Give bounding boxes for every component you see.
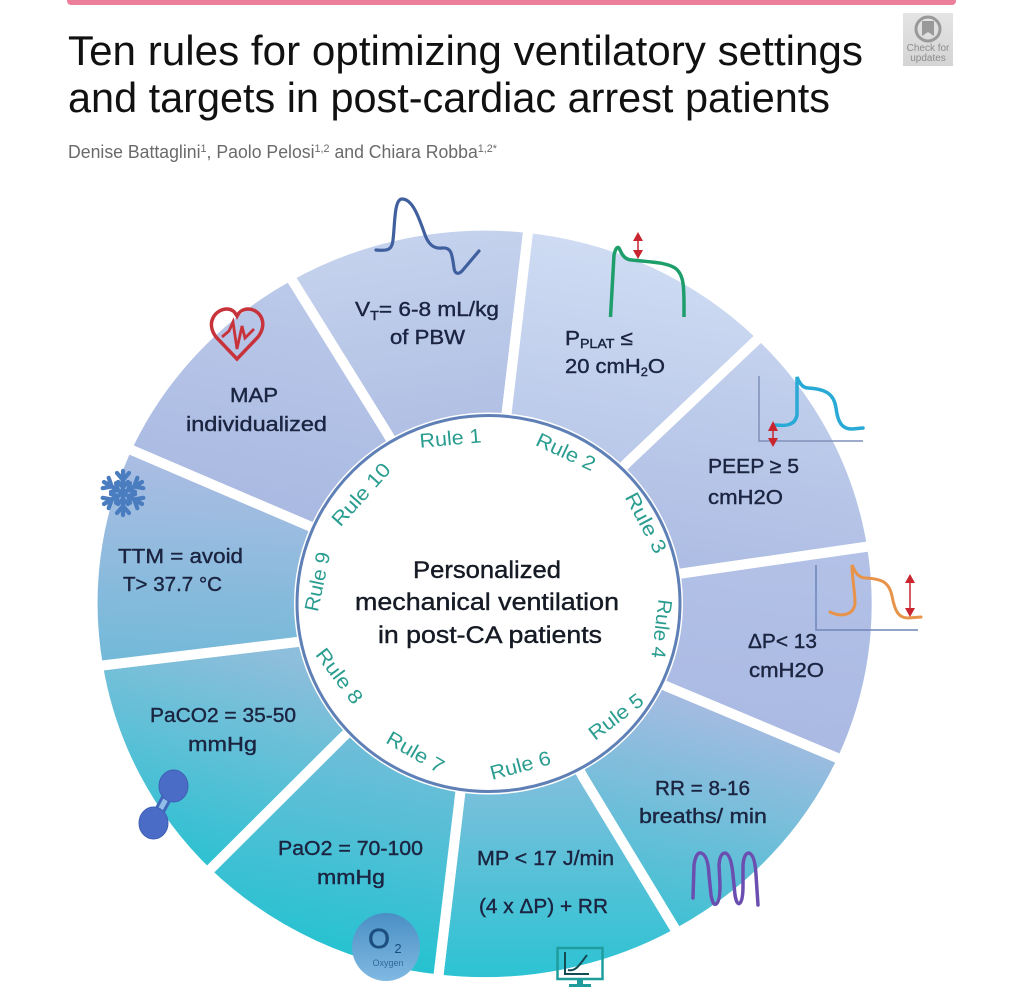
rule 8 text (150, 704, 296, 756)
rule 6 text (477, 847, 614, 918)
rule 4 text: cmH2O (749, 659, 824, 682)
check for updates badge: Check for (907, 43, 950, 54)
rule 2 text (565, 327, 665, 379)
rule labels: Rule 6 (488, 748, 553, 785)
icon: molecule (139, 770, 188, 839)
rule 5 text: breaths/ min (639, 805, 767, 828)
rule 4 text (748, 630, 824, 682)
rule 1 text: T (370, 308, 379, 323)
rule 5 text (639, 777, 767, 828)
panel: rule 2 (488, 228, 761, 603)
rule 2 text: 2 (641, 365, 648, 379)
centre circle (294, 412, 683, 794)
rule 7 text: PaO2 = 70-100 (278, 837, 423, 860)
rule labels: Rule 3 (620, 489, 671, 557)
panel: rule 7 (207, 603, 488, 981)
rule labels (301, 425, 675, 785)
centre text (355, 557, 619, 649)
centre text: mechanical ventilation (355, 589, 619, 616)
rule 9 text: TTM = avoid (118, 545, 243, 568)
centre text: Personalized (413, 557, 561, 584)
rule 8 text: mmHg (188, 733, 257, 756)
panel: rule 5 (488, 603, 842, 933)
rule 3 text: PEEP ≥ 5 (708, 455, 799, 478)
rule 6 text: MP < 17 J/min (477, 847, 614, 870)
rule labels: Rule 9 (301, 550, 335, 613)
title: and targets in post-cardiac arrest patients (68, 74, 830, 121)
panel: rule 6 (438, 603, 678, 987)
icon: oxygen badge: Oxygen (372, 958, 404, 968)
rule labels: Rule 4 (646, 598, 675, 659)
rule 1 text: of PBW (390, 326, 466, 349)
rule 2 text: 20 cmH (565, 355, 636, 378)
panel: rule 9 (93, 448, 488, 666)
rule 2 text: ≤ (614, 327, 633, 350)
rule 8 text: PaCO2 = 35-50 (150, 704, 296, 727)
rule 2 text: PLAT (580, 336, 615, 351)
icon: oxygen badge: 2 (394, 941, 402, 956)
rule 3 text: cmH2O (708, 486, 783, 509)
icon: tidal volume wave (376, 199, 479, 273)
authors: Denise Battaglini (68, 142, 203, 162)
rule labels: Rule 10 (328, 459, 395, 531)
rule labels: Rule 2 (532, 429, 599, 476)
rule 10 text (186, 384, 327, 436)
icon: PEEP curve (759, 376, 863, 447)
wheel of ten rules (93, 199, 921, 987)
rule 6 text: (4 x ΔP) + RR (479, 895, 608, 918)
title: Ten rules for optimizing ventilatory settings (68, 27, 863, 74)
panel: rule 1 (290, 199, 528, 603)
authors: 1,2* (478, 143, 498, 155)
panel: rule 8 (98, 603, 488, 872)
rule labels: Rule 5 (585, 689, 648, 745)
rule 1 text: = 6-8 mL/kg (379, 298, 499, 321)
authors: 1,2 (315, 143, 330, 155)
icon: snowflake (101, 471, 145, 515)
panel: rule 3 (488, 336, 872, 603)
pink top bar (67, 0, 956, 5)
rule 2 text: O (648, 355, 665, 378)
check for updates badge (903, 13, 953, 66)
title (68, 27, 863, 121)
authors: , Paolo Pelosi (207, 142, 315, 162)
check for updates badge: updates (910, 53, 946, 64)
icon: respiratory rate wave (693, 853, 758, 905)
rule labels: Rule 8 (311, 644, 367, 709)
rule 5 text: RR = 8-16 (655, 777, 750, 800)
icon: oxygen badge: O (368, 923, 390, 954)
rule 10 text: individualized (186, 413, 327, 436)
authors: and Chiara Robba (330, 142, 479, 162)
panel: rule 4 (488, 546, 921, 760)
rule 2 text: P (565, 327, 579, 350)
rule 7 text (278, 837, 423, 889)
rule 10 text: MAP (230, 384, 278, 407)
icon: oxygen badge (352, 913, 420, 981)
icon: driving pressure curve (816, 565, 921, 630)
authors: 1 (201, 143, 207, 155)
icon: monitor chart (558, 948, 602, 987)
rule labels: Rule 7 (382, 728, 448, 778)
rule 7 text: mmHg (317, 866, 385, 889)
rule 9 text (118, 545, 243, 596)
rule 1 text (355, 298, 499, 349)
icon: plateau pressure curve (610, 232, 684, 317)
rule 9 text: T> 37.7 °C (123, 573, 222, 596)
icon: heart with pulse (211, 309, 263, 359)
rule labels: Rule 1 (419, 425, 482, 453)
centre text: in post-CA patients (378, 622, 602, 649)
panel: rule 10 (127, 276, 488, 603)
rule 3 text (708, 455, 799, 509)
rule 4 text: ΔP< 13 (748, 630, 817, 653)
rule 1 text: V (355, 298, 369, 321)
